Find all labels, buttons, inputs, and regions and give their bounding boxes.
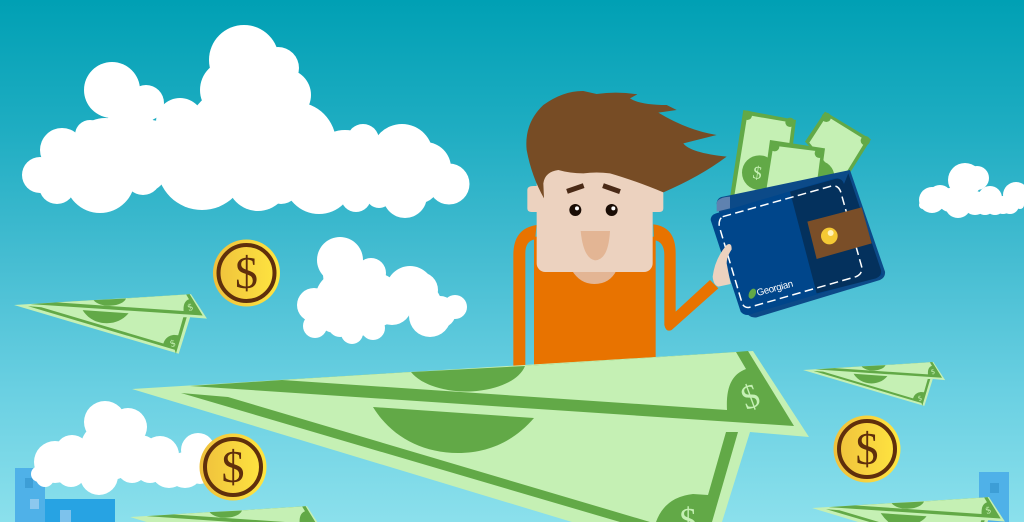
character (513, 91, 885, 370)
paper plane: small left (14, 294, 207, 354)
eyebrows (567, 186, 620, 192)
logo: Georgian (756, 279, 795, 299)
buildings left (15, 468, 115, 522)
clasp (821, 228, 838, 244)
bill: left: $ (752, 162, 763, 183)
bill: left (728, 110, 796, 208)
paper plane: small left: $ (186, 302, 195, 314)
coin: lower left (200, 434, 266, 500)
paper plane: bottom left (130, 506, 317, 522)
ears (527, 186, 663, 212)
paper plane: small right: $ (917, 394, 923, 403)
wallet back (717, 170, 885, 317)
cloud: lower left (31, 401, 215, 495)
paper plane: small right: $ (930, 367, 936, 376)
paper plane: bottom right (812, 497, 1005, 522)
wallet flap (790, 173, 881, 293)
stitching (719, 186, 862, 307)
paper plane: large: $ (736, 377, 765, 418)
nose (581, 231, 610, 260)
cloud: large (22, 25, 470, 218)
neck (572, 270, 617, 284)
paper plane: small right (803, 362, 945, 406)
wallet front (711, 178, 883, 315)
cloud: right (919, 163, 1024, 218)
cloud: middle (297, 237, 467, 344)
paper plane: large (132, 351, 809, 522)
buildings right (979, 472, 1009, 522)
paper plane: bottom right: $ (984, 505, 993, 517)
bill: center (762, 140, 825, 216)
coin: right: $ (856, 423, 878, 474)
coin: right (834, 416, 900, 482)
wallet (711, 110, 885, 317)
bill: right (802, 112, 871, 193)
hand (713, 244, 732, 287)
coin: top: $ (235, 247, 258, 298)
coin: top (213, 240, 280, 306)
eyes (569, 204, 618, 216)
torso (534, 237, 656, 370)
arms (513, 224, 718, 370)
strap (807, 207, 872, 259)
coin: lower left: $ (222, 441, 244, 492)
paper plane: small left: $ (169, 338, 177, 350)
hair (526, 91, 727, 198)
face (537, 160, 653, 272)
